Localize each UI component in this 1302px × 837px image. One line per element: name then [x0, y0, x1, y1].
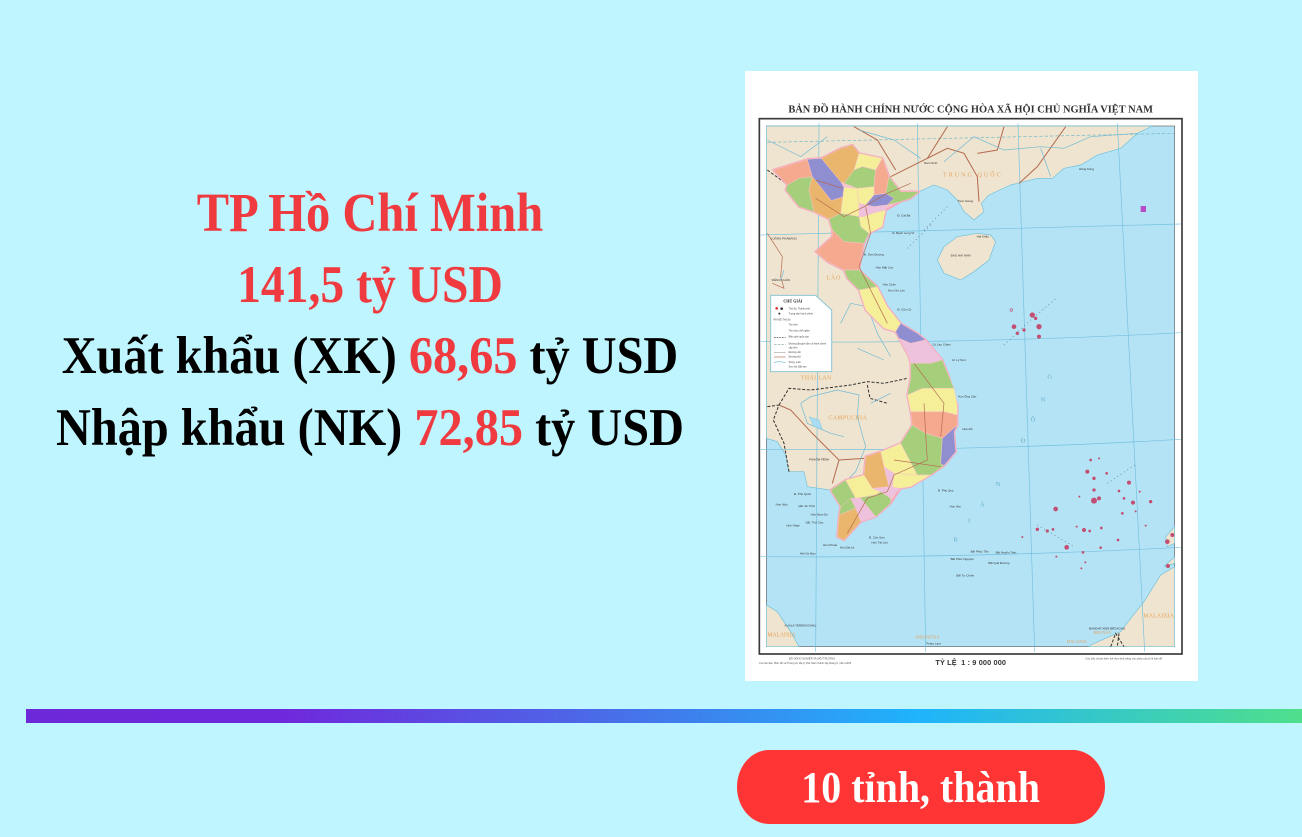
- place labels: Đ. Cát Bà: [897, 214, 911, 218]
- place labels: Bãi Phúc Tần: [971, 549, 989, 553]
- map frame: [759, 119, 1182, 654]
- place labels: Đ. Sơn Dương: [864, 252, 884, 256]
- East Sea lettering: [953, 373, 1052, 544]
- legend: Sông, suối: [789, 361, 801, 364]
- Tonle Sap lake: [809, 417, 822, 429]
- country and sea labels: LÀO: [827, 273, 841, 281]
- sea: [766, 126, 1175, 647]
- neighbouring land: [766, 126, 1175, 647]
- place labels: Hòn Nhạn: [786, 524, 800, 528]
- map credits: BỘ NÔNG NGHIỆP VÀ MÔI TRƯỜNG: [789, 656, 835, 661]
- legend: HÀ NỘI Thủ đô: [773, 318, 791, 321]
- place labels: Nam Ninh: [924, 161, 938, 165]
- place labels: Bãi Tư Chính: [956, 573, 974, 577]
- pill label: number of provinces: 10 tỉnh, thành: [802, 762, 1040, 812]
- East Sea lettering: I: [968, 517, 970, 524]
- East Sea lettering: N: [1041, 397, 1046, 404]
- dashed borders: [767, 170, 1124, 647]
- place labels: LUÔNG PHABANG: [771, 236, 798, 241]
- country and sea labels: MALAIXIA: [1143, 614, 1175, 620]
- East Sea lettering: N: [996, 481, 1001, 488]
- legend: CHÚ GIẢI: [783, 299, 803, 304]
- place labels: QĐ. Thổ Chu: [806, 520, 824, 524]
- place labels: Đ. Bạch Long Vĩ: [892, 231, 914, 235]
- place labels: BANDAR XERI BÊGAOAN: [1089, 625, 1125, 630]
- country and sea labels: [767, 170, 1175, 644]
- place labels: Bãi Phúc Nguyên: [951, 557, 974, 561]
- heading: city name: TP Hồ Chí Minh: [197, 182, 543, 243]
- country and sea labels: CAMPUCHIA: [828, 415, 867, 421]
- island chains: [907, 207, 1137, 547]
- place labels: Hòn Gió Lớn: [888, 289, 905, 293]
- place labels: Hòn Nậu: [776, 503, 788, 507]
- scale label: TỶ LỆ 1 : 9 000 000: [935, 658, 1006, 667]
- map of Vietnam: [745, 71, 1198, 681]
- graticule: [761, 123, 1181, 652]
- legend: Tên thực thể ngầm: [789, 329, 810, 332]
- place labels: Hòn Khoai: [823, 543, 837, 547]
- legend: Tên tỉnh: [789, 324, 798, 327]
- place labels: Hải Khẩu: [977, 235, 989, 239]
- rivers: [767, 130, 1137, 483]
- country and sea labels: INDONÊXIA: [915, 634, 940, 639]
- place labels: Hòn Chim: [883, 283, 897, 287]
- place labels: Hòn Mắt Con: [876, 264, 894, 269]
- import value: Nhập khẩu (NK) 72,85 tỷ USD: [56, 399, 684, 457]
- place labels: Cù Lao Chàm: [932, 342, 951, 346]
- legend: Đường sắt: [789, 351, 801, 354]
- legend: Sơn hà, Bãi san: [789, 366, 807, 369]
- country and sea labels: BRUNÂY: [1093, 630, 1112, 635]
- place labels: Pulau Laut: [926, 641, 941, 645]
- legend: Đường địa giới đơn vị hành chính: [789, 342, 827, 345]
- place labels: Bãi Quế Đường: [988, 561, 1010, 565]
- East Sea lettering: Đ: [1021, 438, 1026, 445]
- place labels: Hòn Ông Căn: [958, 393, 977, 398]
- country and sea labels: TRUNG QUỐC: [943, 170, 1001, 178]
- place labels: Hòn Nam Du: [811, 513, 828, 517]
- place labels: VIÊNG CHĂN: [771, 277, 790, 282]
- place labels: Hải Gò Bào: [800, 552, 816, 556]
- legend: Trung tâm hành chính: [789, 313, 814, 316]
- legend: [771, 295, 832, 372]
- East Sea lettering: G: [1047, 373, 1052, 380]
- gradient divider bar: [26, 709, 1302, 723]
- East Sea lettering: À: [980, 501, 985, 509]
- place labels: Đ. Lý Sơn: [952, 358, 966, 362]
- Vietnam provinces: [773, 145, 957, 540]
- legend: Đường ôtô: [789, 356, 801, 359]
- total trade value: 141,5 tỷ USD: [237, 256, 503, 314]
- pill label: number of provinces: [737, 750, 1105, 824]
- East Sea lettering: B: [953, 537, 958, 544]
- place labels: Hòn Đá Lẻ: [840, 545, 855, 549]
- place labels: Hòn Đỏ: [962, 427, 973, 431]
- place labels: Hòn Hải: [950, 505, 961, 509]
- East Sea lettering: Ô: [1031, 416, 1036, 424]
- place labels: [771, 161, 1125, 645]
- place labels: QĐ. An Thới: [798, 504, 815, 508]
- legend: cấp tỉnh: [789, 346, 798, 349]
- map credits: [759, 656, 1163, 665]
- legend: Thủ đô, Thành phố: [789, 308, 810, 311]
- place labels: Trạm Giang: [957, 199, 973, 203]
- export value: Xuất khẩu (XK) 68,65 tỷ USD: [62, 327, 678, 385]
- map credits: Các dấu chuẩn biên thể theo khả năng cho phép của tỷ lệ bản đồ: [1085, 656, 1163, 660]
- map title: BẢN ĐỒ HÀNH CHÍNH NƯỚC CỘNG HÒA XÃ HỘI CHỦ NGHĨA VIỆT NAM: [788, 103, 1154, 116]
- place labels: Đ. Cồn Cỏ: [897, 308, 912, 312]
- place labels: Hồng Kông: [1079, 167, 1094, 171]
- legend: Biên giới quốc gia: [789, 336, 809, 339]
- country outline: [773, 145, 957, 540]
- country and sea labels: THÁI LAN: [801, 373, 832, 381]
- islands: [1010, 206, 1174, 569]
- place labels: Bãi Huyền Trân: [996, 551, 1017, 555]
- map credits: Cục Đo đạc, Bản đồ và Thông tin địa lý Việt Nam thành lập tháng 6, năm 2025: [759, 661, 852, 665]
- place labels: Đ. Phú Quý: [938, 488, 954, 492]
- inner roads: [816, 180, 944, 533]
- place labels: Đ. Côn Sơn: [869, 535, 885, 539]
- neighbouring borders: [767, 127, 1066, 483]
- place labels: Đ. Phú Quốc: [794, 492, 812, 496]
- place labels: PHNÔM PÊNH: [809, 457, 829, 462]
- place labels: KUALA TERENGGANU: [785, 624, 816, 628]
- place labels: ĐẢO HẢI NAM: [951, 252, 971, 257]
- tropic line: [767, 133, 1174, 142]
- country and sea labels: MALAIXIA: [767, 633, 796, 639]
- country and sea labels: MALAIXIA: [1067, 639, 1087, 644]
- place labels: Hòn Tài Lớn: [871, 540, 888, 544]
